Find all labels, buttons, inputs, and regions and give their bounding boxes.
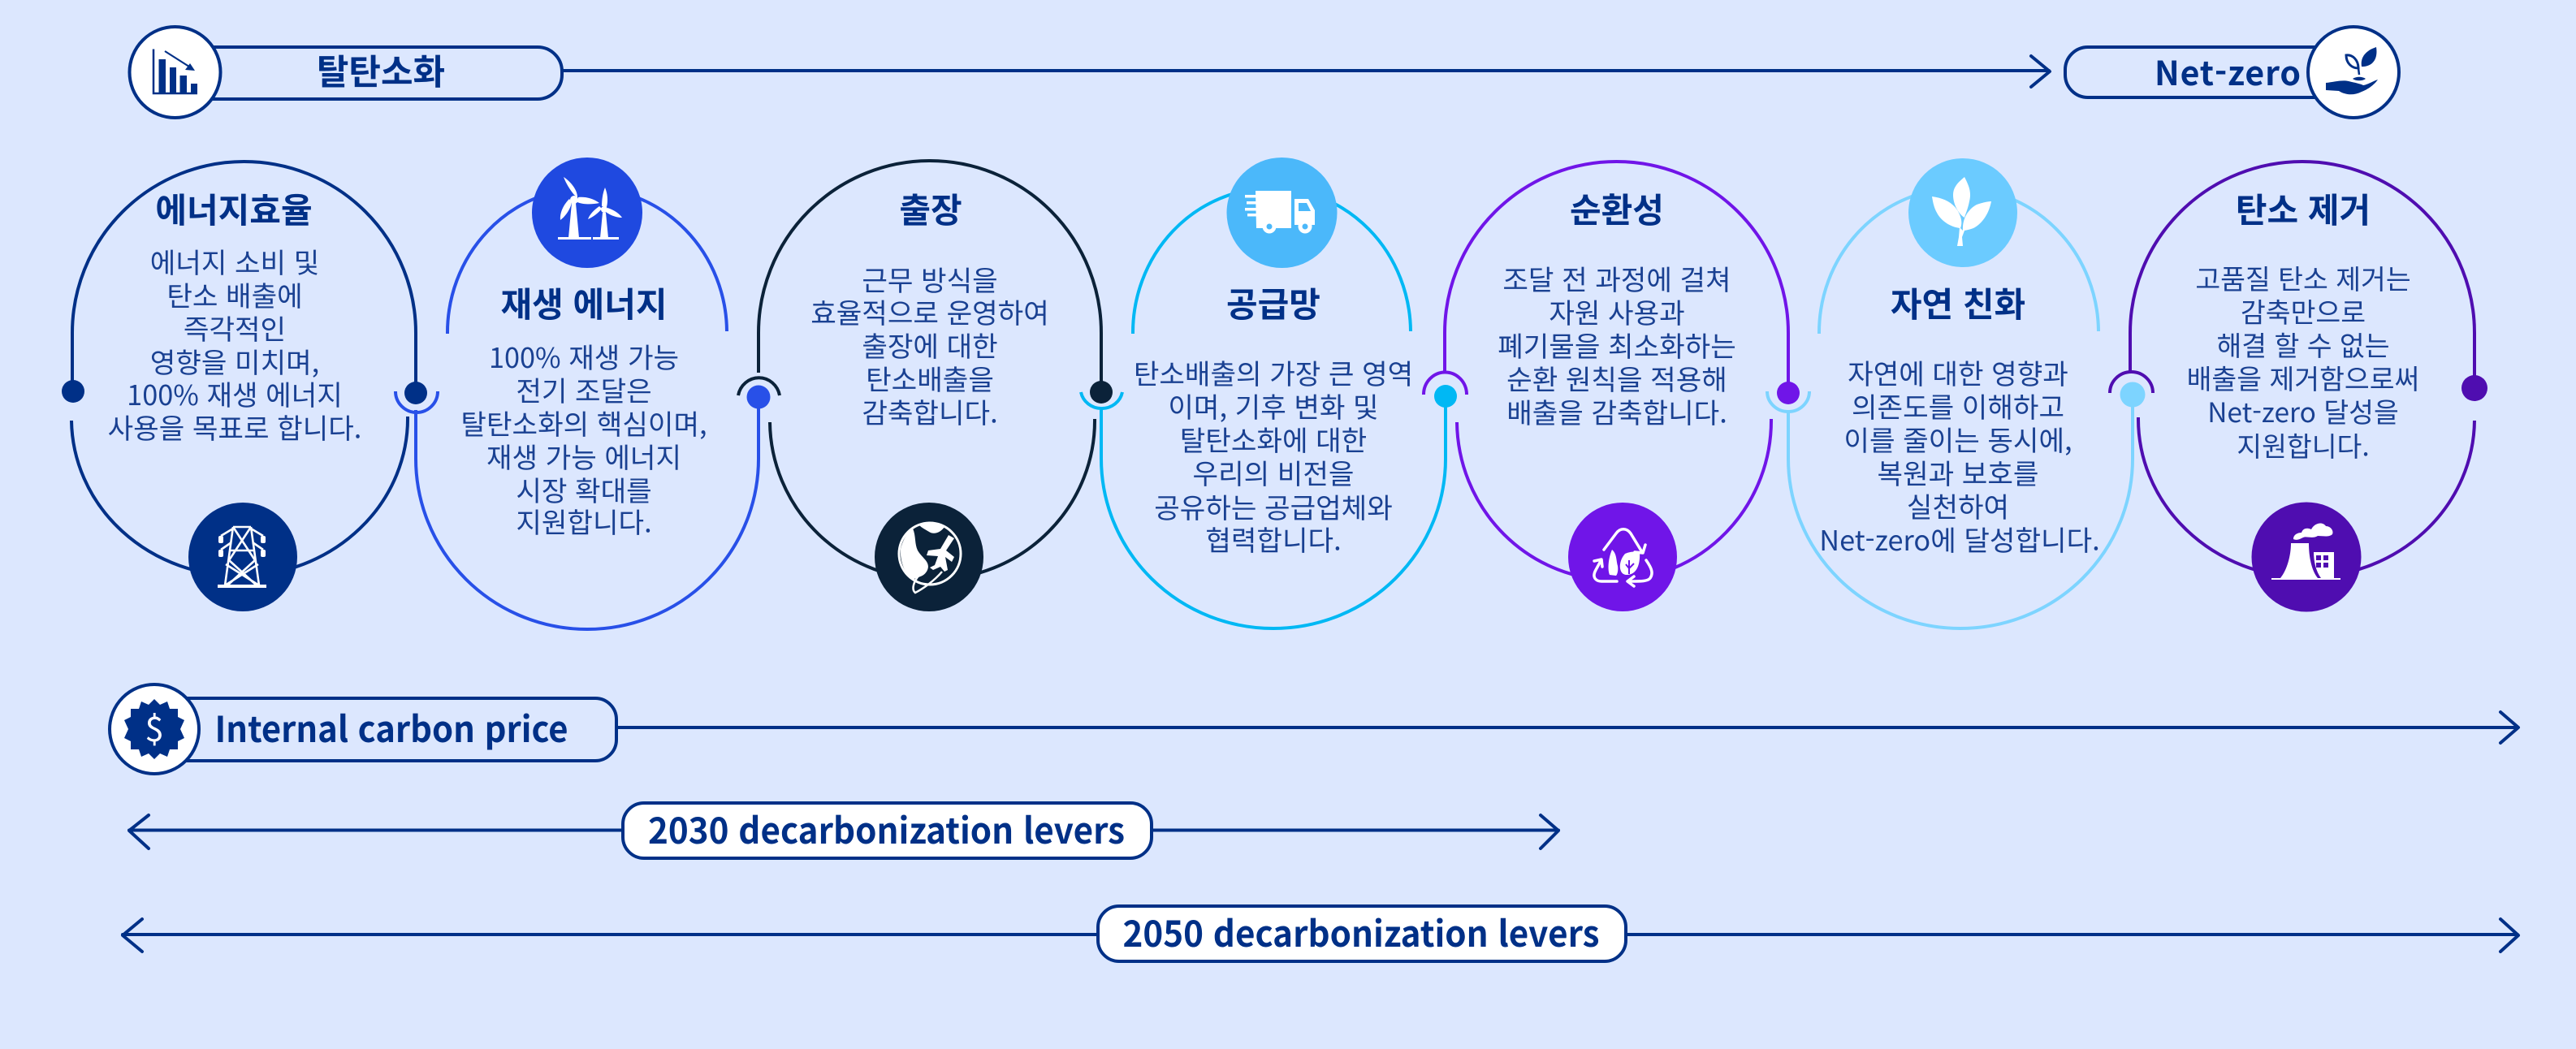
- text block: 배출을 감축합니다.: [1506, 391, 1727, 431]
- text block: 즉각적인: [184, 307, 286, 348]
- heading: 출장: [899, 183, 962, 233]
- heading: 자연 친화: [1891, 278, 2025, 327]
- icon: wind turbines: [532, 158, 642, 268]
- icon: leaves: [1908, 158, 2017, 267]
- heading: 에너지효율: [155, 183, 313, 233]
- text block: 사용을 목표로 합니다.: [108, 406, 361, 447]
- text block: Net-zero 달성을: [2207, 391, 2399, 430]
- text block: 100% 재생 에너지: [127, 373, 343, 413]
- text block: 자원 사용과: [1549, 291, 1685, 331]
- ring: energy efficiency outline: [62, 162, 427, 576]
- icon: transmission tower: [188, 503, 297, 611]
- pill: 2050 decarbonization levers: 2050 decarbonization levers: [1122, 905, 1600, 957]
- text block: 탄소배출의 가장 큰 영역: [1134, 352, 1413, 392]
- pill: 2030 decarbonization levers: 2030 decarbonization levers: [648, 802, 1125, 854]
- row: 2030 decarbonization levers: [129, 802, 1558, 858]
- text block: 감축합니다.: [862, 391, 998, 431]
- row: internal carbon price: [110, 684, 2518, 774]
- text block: 실천하여: [1907, 485, 2009, 525]
- icon: recycling arrows with flame and leaf: [1568, 503, 1677, 611]
- icon: hand holding seedling: [2308, 27, 2399, 118]
- ring: supply chain outline: [1081, 188, 1457, 628]
- icon: declining bar chart: [130, 27, 221, 118]
- panel: 에너지효율: [62, 162, 427, 611]
- pill: Net-zero: Net-zero: [2155, 46, 2301, 95]
- pill: 탈탄소화: 탈탄소화: [317, 45, 445, 95]
- arrow: top timeline: [562, 56, 2050, 87]
- text block: 재생 가능 에너지: [486, 435, 681, 476]
- text block: 폐기물을 최소화하는: [1498, 324, 1736, 365]
- arrow: internal carbon price timeline: [616, 712, 2518, 743]
- text block: [1498, 257, 1736, 431]
- pill: Net-zero: [2065, 46, 2374, 97]
- panel: 탄소 제거: [2110, 162, 2487, 612]
- text block: [810, 258, 1049, 431]
- text block: 배출을 제거함으로써: [2187, 357, 2419, 397]
- text block: 이며, 기후 변화 및: [1168, 385, 1379, 425]
- panel: 재생 에너지: [395, 158, 770, 629]
- panel: 출장: [738, 161, 1113, 611]
- icon: power plant with smoke: [2251, 502, 2362, 612]
- text block: 공유하는 공급업체와: [1154, 486, 1393, 526]
- text block: 지원합니다.: [516, 500, 652, 541]
- text block: 감축만으로: [2241, 291, 2366, 330]
- pill: 탈탄소화: [154, 45, 562, 99]
- ring: nature-friendly outline: [1767, 188, 2146, 628]
- text block: [108, 240, 361, 447]
- text block: [1134, 352, 1413, 559]
- text block: 협력합니다.: [1205, 518, 1342, 559]
- icon: delivery truck: [1226, 158, 1337, 268]
- arrow: 2050 span: [123, 919, 2518, 952]
- text block: 시장 확대를: [516, 468, 652, 509]
- header: decarbonization to net-zero timeline: [130, 27, 2399, 118]
- text block: 지원합니다.: [2237, 425, 2370, 464]
- text block: 탄소배출을: [866, 357, 994, 398]
- ring: business travel outline: [738, 161, 1113, 580]
- text block: 탈탄소화의 핵심이며,: [460, 402, 707, 442]
- text block: 해결 할 수 없는: [2216, 324, 2390, 364]
- text block: 이를 줄이는 동시에,: [1843, 418, 2072, 459]
- text block: 조달 전 과정에 걸쳐: [1502, 257, 1731, 298]
- text block: 우리의 비전을: [1193, 451, 1354, 492]
- text block: 출장에 대한: [862, 324, 998, 365]
- text block: 탄소 배출에: [166, 274, 303, 314]
- text block: 영향을 미치며,: [150, 340, 319, 381]
- panel: 공급망: [1081, 158, 1457, 628]
- text block: 자연에 대한 영향과: [1848, 352, 2068, 392]
- text block: 근무 방식을: [862, 258, 998, 299]
- heading: 순환성: [1570, 183, 1664, 233]
- pill: Internal carbon price: [146, 698, 616, 761]
- panel: 자연 친화: [1767, 158, 2146, 628]
- icon: globe and airplane: [875, 503, 983, 611]
- heading: 공급망: [1226, 278, 1320, 327]
- ring: carbon removal outline: [2110, 162, 2487, 577]
- ring: circularity outline: [1424, 162, 1800, 580]
- row: 2050 decarbonization levers: [123, 905, 2518, 961]
- text block: 고품질 탄소 제거는: [2195, 257, 2411, 297]
- text block: 100% 재생 가능: [489, 335, 679, 376]
- text block: [460, 335, 707, 541]
- text block: [2187, 257, 2419, 464]
- icon: dollar badge: $: [145, 702, 164, 752]
- text block: [1819, 352, 2100, 559]
- heading: 재생 에너지: [501, 278, 667, 327]
- icon: dollar badge: [110, 684, 199, 774]
- text block: 탈탄소화에 대한: [1180, 418, 1367, 459]
- text block: 효율적으로 운영하여: [810, 291, 1049, 331]
- arrow: 2030 span: [129, 815, 1558, 848]
- text block: Net-zero에 달성합니다.: [1819, 518, 2100, 559]
- heading: 탄소 제거: [2236, 183, 2371, 233]
- text block: 에너지 소비 및: [150, 240, 319, 281]
- ring: renewable energy outline: [395, 188, 770, 629]
- text block: 복원과 보호를: [1878, 451, 2038, 492]
- pill: Internal carbon price: Internal carbon price: [214, 701, 568, 753]
- text block: 전기 조달은: [516, 369, 652, 409]
- text block: 의존도를 이해하고: [1852, 385, 2064, 425]
- panel: 순환성: [1424, 162, 1800, 611]
- text block: 순환 원칙을 적용해: [1506, 357, 1727, 398]
